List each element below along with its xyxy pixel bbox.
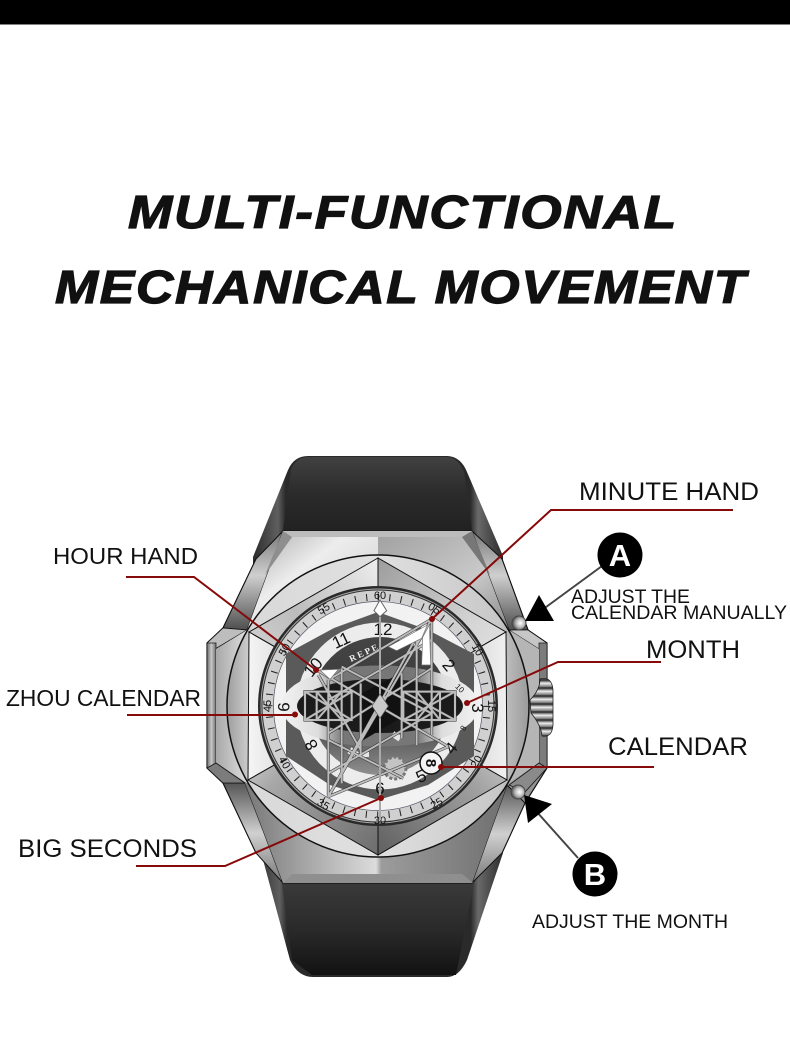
badge B: B [584, 857, 606, 892]
callout: hour hand [53, 543, 319, 673]
hour numerals: 9 [274, 702, 293, 712]
badge A: A [609, 538, 631, 573]
lattice shadow [305, 619, 455, 797]
seconds numerals: 25 [429, 796, 445, 812]
note A: ADJUST THE [571, 587, 690, 608]
seconds numerals: 30 [374, 815, 386, 827]
dark oval aperture [297, 679, 463, 733]
hour numerals: 8 [458, 724, 469, 732]
callout: zhou calendar: ZHOU CALENDAR [6, 685, 201, 711]
callout: month: MONTH [646, 636, 740, 664]
callout: minute hand [429, 478, 759, 622]
title line 2: MECHANICAL MOVEMENT [55, 261, 750, 313]
white hand tips [320, 669, 338, 679]
callout: big seconds [18, 795, 384, 866]
note B: ADJUST THE MONTH [532, 912, 728, 933]
center diamond [372, 694, 388, 718]
hour numerals: 6 [375, 779, 385, 798]
left lower lug band [223, 783, 283, 883]
hour numerals: 10 [300, 654, 327, 681]
top black bar [0, 0, 790, 24]
note A: CALENDAR MANUALLY [571, 603, 787, 624]
small movement parts [347, 731, 402, 758]
top diamond [374, 600, 387, 617]
seconds numerals: 15 [485, 700, 497, 712]
right upper lug band [472, 531, 528, 630]
seconds numerals [262, 590, 497, 827]
callout: minute hand: MINUTE HAND [579, 478, 759, 506]
hour numerals: 8 [301, 736, 322, 754]
lattice bars [305, 619, 455, 797]
badge A [598, 532, 642, 578]
seconds numerals: 05 [426, 601, 442, 617]
callout: zhou calendar [6, 685, 298, 718]
logo text: R E P E [348, 642, 379, 664]
hour numerals: 2 [438, 656, 459, 675]
calendar window [420, 752, 442, 774]
left ear [207, 628, 247, 783]
callout: big seconds: BIG SECONDS [18, 835, 197, 863]
callout: month [464, 636, 740, 706]
hour numerals: 12 [374, 620, 392, 639]
hour numerals: 3 [468, 703, 487, 713]
top plate [247, 531, 509, 630]
dial dark hexagon [286, 612, 474, 800]
seconds hand [377, 612, 383, 820]
arrow A [525, 566, 602, 621]
crown [530, 678, 553, 736]
badge B [572, 852, 618, 896]
gear [384, 757, 406, 779]
hour numerals: 11 [329, 628, 353, 653]
bezel circle [227, 555, 529, 857]
top strap [253, 456, 503, 600]
bottom plate [245, 783, 507, 883]
callout: calendar: CALENDAR [608, 733, 748, 761]
title [55, 186, 750, 313]
central black panel [361, 673, 402, 742]
dial white ring [304, 630, 456, 782]
hour numerals [274, 620, 487, 798]
inner dial disc [274, 602, 482, 810]
arrow B [524, 795, 578, 858]
callout: calendar [438, 733, 748, 770]
hour numerals: 10 [453, 682, 466, 695]
seconds numerals: 45 [262, 700, 274, 712]
seconds numerals: 40 [276, 755, 292, 771]
seconds numerals: 55 [316, 601, 332, 617]
hour numerals: 4 [441, 739, 462, 758]
bottom strap [255, 830, 503, 977]
right lower lug band [472, 785, 525, 883]
seconds numerals: 50 [277, 642, 293, 658]
callout: hour hand: HOUR HAND [53, 543, 198, 569]
hand and lattice structure [305, 600, 455, 820]
right ear [509, 630, 547, 792]
lower pusher [511, 785, 525, 799]
watch case [207, 531, 547, 883]
watch illustration [207, 456, 553, 977]
seconds numerals: 10 [469, 642, 485, 658]
calendar window: 8 [422, 759, 439, 767]
hexagon facets [248, 558, 507, 855]
left upper lug band [223, 531, 283, 630]
title line 1: MULTI-FUNCTIONAL [128, 186, 678, 238]
seconds numerals: 35 [315, 797, 331, 813]
upper pusher [512, 616, 526, 630]
skeleton movement [289, 637, 471, 779]
note A [571, 587, 787, 624]
date band [289, 673, 471, 739]
seconds numerals: 20 [469, 754, 485, 770]
hour numerals: 5 [413, 766, 430, 787]
seconds numerals: 60 [374, 590, 386, 602]
seconds chapter ring [258, 586, 498, 827]
